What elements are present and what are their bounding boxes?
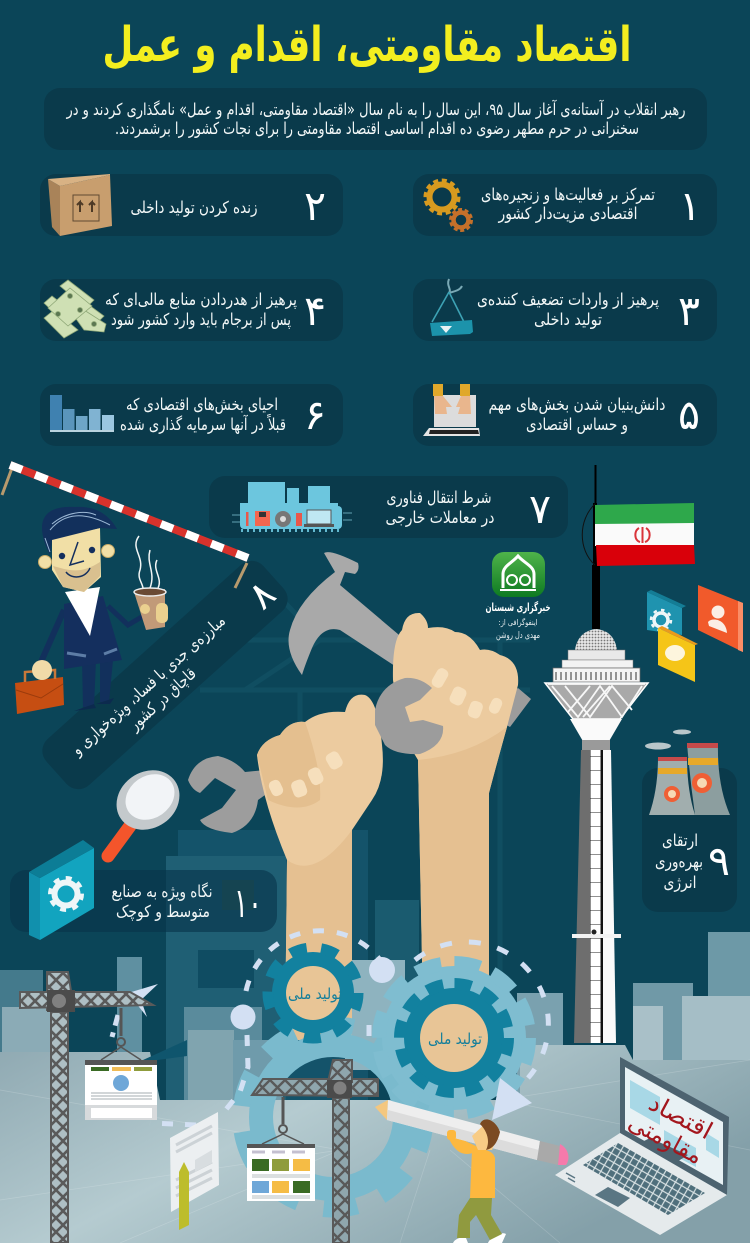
item 3 text: پرهیز از واردات تضعیف کننده‌ی xyxy=(477,290,659,310)
panel: item 4 xyxy=(40,279,343,341)
number 9: ۹ xyxy=(708,837,730,885)
Milad tower xyxy=(545,465,648,1043)
hammer xyxy=(288,552,405,675)
panel: item 2 xyxy=(40,174,343,236)
panel: item 1: اقتصادی مزیت‌دار کشور xyxy=(498,204,638,224)
large gear label: تولید ملی xyxy=(428,1030,482,1048)
number 6: ۶ xyxy=(304,391,326,439)
orbit nodes xyxy=(128,957,532,1120)
icon: magnifier xyxy=(105,758,191,856)
wrench: left xyxy=(188,756,272,833)
torso xyxy=(470,1149,495,1198)
panel: item 4: پس از برجام باید وارد کشور شود xyxy=(111,310,291,330)
character: boy xyxy=(447,1132,506,1243)
hat xyxy=(42,507,117,555)
number 4: ۴ xyxy=(304,287,326,335)
item 8 text: مبارزه‌ی جدی با فساد، ویژه‌خواری و xyxy=(67,611,230,760)
icon: cooling towers xyxy=(645,730,730,815)
icon: gears xyxy=(426,180,472,230)
briefcase xyxy=(15,677,64,714)
barrier xyxy=(2,465,248,588)
panel: item 5: و حساس اقتصادی xyxy=(526,415,628,435)
panel: item 9 xyxy=(642,730,737,912)
intro line 1: رهبر انقلاب در آستانه‌ی آغاز سال ۹۵، این سال را به نام سال «اقتصاد مقاومتی، اقدام و عمل» نامگذاری کردند و در xyxy=(66,100,685,120)
icon: crane hook with crate xyxy=(430,279,473,336)
icon: stacks of money xyxy=(44,280,106,338)
item 9 text: ارتقای xyxy=(662,831,698,851)
tiers xyxy=(568,650,625,660)
icon: hands on laptop xyxy=(423,384,480,436)
panel: item 5 xyxy=(413,384,717,446)
icon: news agency logo: اینفوگرافی از: xyxy=(498,617,538,627)
hanging web page left xyxy=(85,1060,157,1120)
item 7 text: شرط انتقال فناوری xyxy=(386,488,492,508)
right wrench handle end xyxy=(485,688,531,727)
panel: item 3: تولید داخلی xyxy=(534,310,602,330)
gear: large national production xyxy=(379,963,529,1113)
icons: app tiles xyxy=(647,585,743,682)
ground xyxy=(0,1045,750,1243)
trousers xyxy=(457,1198,502,1240)
ghost building behind the gears xyxy=(166,830,419,1110)
legs xyxy=(82,660,113,707)
suit xyxy=(64,596,122,669)
dome xyxy=(575,629,617,650)
big pencil xyxy=(375,1100,568,1165)
number 8: ۸ xyxy=(239,572,284,618)
shirt xyxy=(65,587,100,636)
service ring xyxy=(572,934,621,938)
base xyxy=(555,1133,727,1235)
wrench: right head xyxy=(375,678,443,754)
item 5 text: دانش‌بنیان شدن بخش‌های مهم xyxy=(488,395,666,415)
icon: technology board xyxy=(232,482,352,532)
panel: item 3 xyxy=(413,279,717,341)
panel: item 7 xyxy=(209,476,568,538)
laptop screen text: اقتصاد xyxy=(644,1089,717,1145)
item 6 text: احیای بخش‌های اقتصادی که xyxy=(126,395,278,414)
logo text: خبرگزاری شبستان xyxy=(486,601,550,614)
crane: right xyxy=(247,1060,378,1243)
panel: item 7: در معاملات خارجی xyxy=(386,508,494,528)
faint ground rays xyxy=(0,1060,750,1243)
panel: item 1 xyxy=(413,174,717,236)
screen bezel xyxy=(620,1057,729,1195)
panel: item 9: بهره‌وری xyxy=(655,852,703,872)
item 10 text: نگاه ویژه به صنایع xyxy=(112,882,212,902)
number 5: ۵ xyxy=(678,391,700,439)
number 7: ۷ xyxy=(529,485,551,533)
number 10: ۱۰ xyxy=(234,879,262,927)
panel: item 6: قبلاً در آنها سرمایه گذاری شده xyxy=(120,414,286,435)
panel: item 10 xyxy=(10,870,277,932)
panel: item 6 xyxy=(40,384,343,446)
dark band behind gears xyxy=(143,1040,187,1062)
teal tile xyxy=(647,592,682,635)
face xyxy=(52,528,101,592)
number 1: ۱ xyxy=(679,182,701,230)
icon: gear block xyxy=(29,840,94,940)
laptop xyxy=(555,1057,729,1235)
shoes xyxy=(453,1233,506,1243)
laptop: مقاومتی xyxy=(624,1108,708,1170)
document and pencil xyxy=(170,1112,219,1230)
hanging web page right xyxy=(247,1144,315,1201)
pockets xyxy=(67,649,117,656)
character: businessman xyxy=(15,507,168,714)
shaft xyxy=(574,750,591,1043)
icon: bar chart xyxy=(50,395,114,432)
panel: item 8: قاچاق در کشور xyxy=(124,664,201,735)
skyline xyxy=(0,932,750,1243)
panel: item 8 xyxy=(36,554,294,796)
orange tile xyxy=(698,585,743,652)
right hand xyxy=(393,613,518,1010)
rotated card xyxy=(36,554,294,796)
number 2: ۲ xyxy=(304,182,326,230)
panel: intro xyxy=(44,88,707,150)
icon: news agency logo xyxy=(486,552,550,641)
gear: large back ring xyxy=(241,1025,425,1209)
left hand xyxy=(257,695,383,1040)
screen xyxy=(625,1067,723,1185)
ghost crane structure behind the hands xyxy=(200,560,530,1000)
crane: left xyxy=(20,972,157,1243)
dashed orbit lines xyxy=(112,931,548,1125)
coffee cup xyxy=(134,589,165,630)
touchpad xyxy=(595,1187,630,1207)
panel: item 10: متوسط و کوچک xyxy=(116,902,210,922)
icon: cardboard box xyxy=(48,174,112,236)
antenna mast xyxy=(594,465,596,505)
boy head xyxy=(447,1119,500,1150)
panel: item 9: انرژی xyxy=(664,873,696,893)
number 3: ۳ xyxy=(678,287,700,335)
arms xyxy=(41,610,64,662)
right hand finger nails xyxy=(430,666,504,720)
coffee steam xyxy=(136,536,159,588)
yellow tile xyxy=(658,628,695,682)
pod lattice xyxy=(545,683,648,719)
item 4 text: پرهیز از هدردادن منابع مالی‌ای که xyxy=(105,290,297,310)
keyboard xyxy=(583,1143,705,1215)
icon: Iranian flag xyxy=(595,503,695,566)
small gear label: تولید ملی xyxy=(288,985,342,1003)
item 2 text: زنده کردن تولید داخلی xyxy=(130,198,258,218)
item 1 text: تمرکز بر فعالیت‌ها و زنجیره‌های xyxy=(481,185,655,205)
gear: small national production xyxy=(268,948,358,1038)
icon: news agency logo: مهدی دل روشن xyxy=(496,631,540,641)
